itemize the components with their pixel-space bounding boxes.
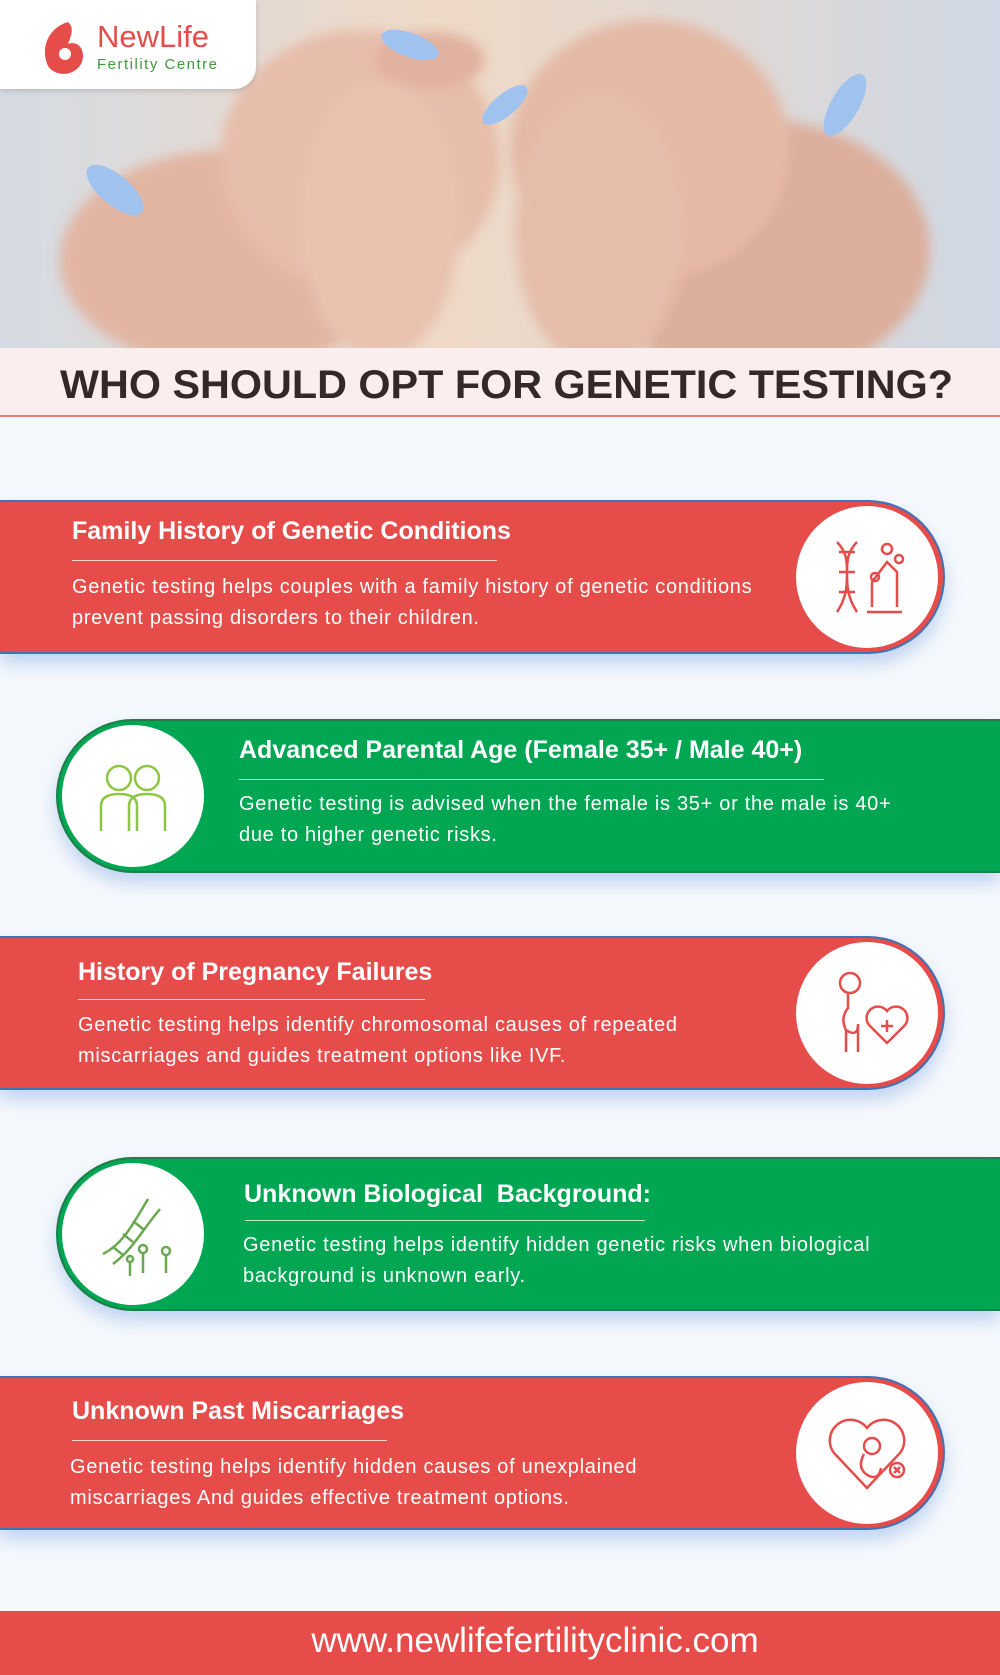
panel: unknown background bbox=[56, 1157, 1000, 1311]
text block: Genetic testing helps identify hidden genetic risks when biological bbox=[243, 1234, 870, 1256]
text block: Genetic testing helps identify hidden causes of unexplained bbox=[70, 1456, 637, 1478]
text block: Genetic testing is advised when the female is 35+ or the male is 40+ bbox=[239, 793, 891, 815]
website url: www.newlifefertilityclinic.com bbox=[311, 1621, 759, 1660]
hero photo bbox=[0, 0, 1000, 348]
text block bbox=[70, 1456, 637, 1509]
text block: prevent passing disorders to their children. bbox=[72, 607, 480, 629]
text block bbox=[72, 576, 752, 629]
text block: Genetic testing helps couples with a family history of genetic conditions bbox=[72, 576, 752, 598]
text block: background is unknown early. bbox=[243, 1265, 526, 1287]
text block: Genetic testing helps identify chromosomal causes of repeated bbox=[78, 1014, 678, 1036]
text block: miscarriages And guides effective treatment options. bbox=[70, 1487, 570, 1509]
icon: pregnant woman bbox=[796, 942, 938, 1084]
logo bbox=[0, 0, 256, 89]
panel: parental age bbox=[56, 719, 1000, 873]
footer bbox=[0, 1611, 1000, 1675]
logo: Fertility Centre bbox=[97, 56, 219, 73]
heading: Unknown Biological Background: bbox=[244, 1180, 651, 1208]
heading: History of Pregnancy Failures bbox=[78, 958, 432, 986]
text block: miscarriages and guides treatment options like IVF. bbox=[78, 1045, 566, 1067]
icon: couple bbox=[62, 725, 204, 867]
panel: past miscarriages bbox=[0, 1376, 945, 1530]
text block bbox=[239, 793, 891, 846]
icon: logo mark bbox=[44, 22, 83, 74]
heading: Advanced Parental Age (Female 35+ / Male 40+) bbox=[239, 736, 802, 764]
icon: dna sperm bbox=[62, 1163, 204, 1305]
panel: pregnancy failures bbox=[0, 936, 945, 1090]
title band: WHO SHOULD OPT FOR GENETIC TESTING? bbox=[60, 363, 953, 407]
text block: due to higher genetic risks. bbox=[239, 824, 498, 846]
heading: Family History of Genetic Conditions bbox=[72, 517, 511, 545]
icon: heart fetus bbox=[796, 1382, 938, 1524]
text block bbox=[243, 1234, 870, 1287]
text block bbox=[78, 1014, 678, 1067]
heading: Unknown Past Miscarriages bbox=[72, 1397, 404, 1425]
panel: family history bbox=[0, 500, 945, 654]
icon: dna bbox=[796, 506, 938, 648]
logo text: NewLife bbox=[97, 19, 209, 54]
title band bbox=[0, 348, 1000, 417]
